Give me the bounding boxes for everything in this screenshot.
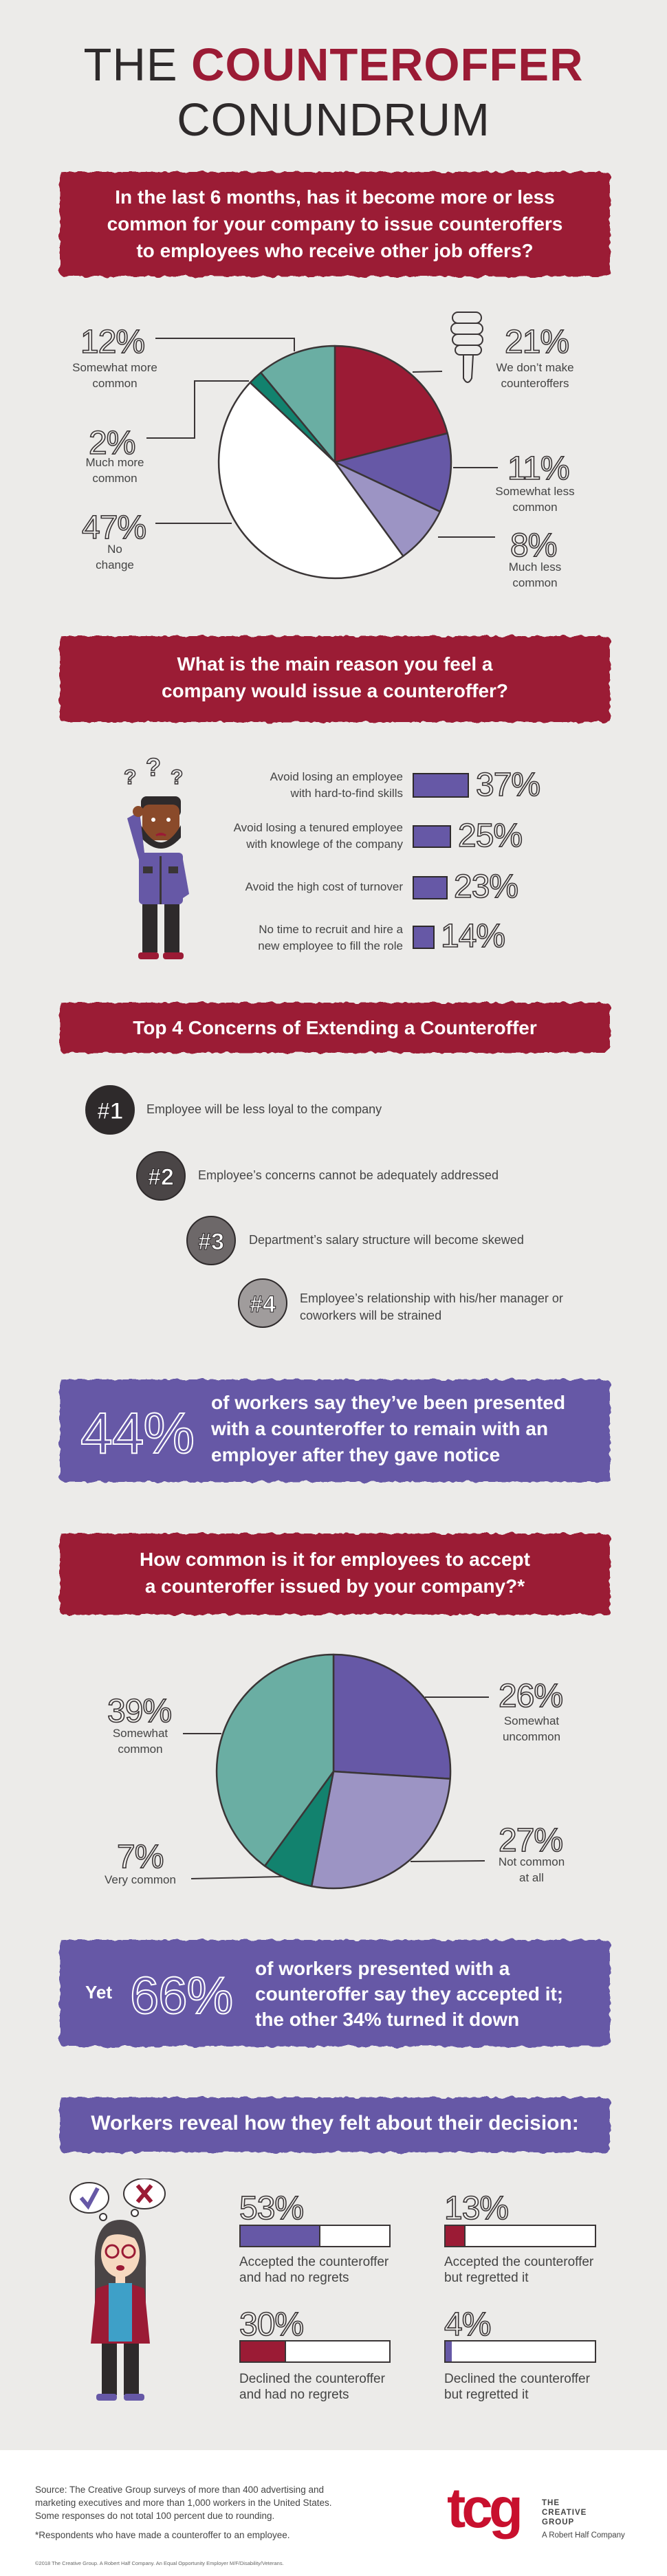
label: 26%: Somewhat	[504, 1714, 559, 1727]
bar row 2: with knowlege of the company	[246, 838, 403, 851]
banner: question 2	[60, 636, 610, 722]
label: 8%: common	[512, 576, 558, 589]
stat: 30% declined no regrets	[239, 2306, 391, 2402]
stat: 53% accepted no regrets: and had no regrets	[239, 2271, 349, 2285]
concern 1	[85, 1085, 382, 1135]
question 2 text: company would issue a counteroffer?	[162, 680, 508, 701]
label: 39%: common	[118, 1743, 163, 1756]
bar row 1	[270, 770, 403, 800]
stat: 13% accepted regretted: 13%	[444, 2190, 508, 2227]
question 1 text	[107, 186, 562, 261]
66% text	[255, 1958, 563, 2030]
title	[84, 39, 583, 146]
label: 39%: Somewhat	[113, 1727, 168, 1740]
label: 12%: Somewhat more	[72, 361, 157, 374]
banner: workers reveal	[60, 2097, 610, 2152]
66% text: counteroffer say they accepted it;	[255, 1983, 563, 2005]
title: THE COUNTEROFFER	[84, 39, 583, 91]
stat: 30% declined no regrets: 30%	[239, 2306, 303, 2343]
concerns heading: Top 4 Concerns of Extending a Counteroffer	[133, 1017, 537, 1038]
illustration: woman with thought bubbles	[69, 2179, 166, 2401]
bar row 4: No time to recruit and hire a	[259, 923, 403, 936]
label: 7%	[105, 1839, 176, 1886]
question 2 text	[162, 653, 508, 701]
question 1 text: In the last 6 months, has it become more or less	[115, 186, 555, 208]
illustration: confused man: ?	[124, 766, 136, 789]
big number 44%: 44%	[80, 1401, 194, 1465]
label: 47%: change	[96, 558, 134, 571]
bar row 1: Avoid losing an employee	[270, 770, 403, 783]
44% text: with a counteroffer to remain with an	[211, 1418, 548, 1439]
logo: tcg	[447, 2477, 519, 2540]
concern 4	[238, 1278, 563, 1328]
stat: 4% declined regretted: but regretted it	[444, 2388, 529, 2402]
concern 2: Employee’s concerns cannot be adequately addressed	[198, 1168, 499, 1182]
label: 47%: 47%	[82, 510, 146, 546]
label: 8%	[509, 527, 561, 589]
label: 11%: common	[512, 501, 558, 514]
label: 2%: 2%	[89, 425, 135, 461]
label: 12%	[72, 324, 157, 390]
stat: 53% accepted no regrets: 53%	[239, 2190, 303, 2227]
bar row 2: Avoid losing a tenured employee	[234, 821, 403, 834]
66% text: of workers presented with a	[255, 1958, 510, 1979]
label: 11%: 11%	[507, 450, 569, 487]
bar row 4: new employee to fill the role	[258, 939, 403, 952]
bar row 4	[258, 923, 403, 952]
label: 21%	[496, 324, 574, 390]
banner: top 4 concerns	[60, 1003, 610, 1053]
bar row 1: with hard-to-find skills	[291, 787, 403, 800]
illustration: confused man: ?	[171, 766, 183, 789]
stat: 13% accepted regretted: Accepted the counteroffer	[444, 2255, 593, 2269]
label: 12%: 12%	[80, 324, 144, 360]
logo: CREATIVE	[542, 2509, 587, 2517]
label: 21%: counteroffers	[501, 377, 569, 390]
44% text: of workers say they’ve been presented	[211, 1392, 565, 1413]
66% text: the other 34% turned it down	[255, 2009, 519, 2030]
stat: 53% accepted no regrets: Accepted the counteroffer	[239, 2255, 389, 2269]
bar chart: reasons: 14%	[441, 918, 505, 954]
concern 4: #4	[250, 1291, 276, 1318]
source text: marketing executives and more than 1,000 workers in the United States.	[35, 2498, 331, 2508]
label: 2%	[85, 425, 144, 485]
label: 26%: 26%	[499, 1678, 562, 1714]
concern 4: coworkers will be strained	[300, 1309, 441, 1322]
concern 3	[186, 1216, 524, 1265]
concern 2: #2	[148, 1164, 174, 1190]
callout: 44%	[60, 1379, 610, 1482]
label: 26%	[499, 1678, 562, 1743]
label: 8%: 8%	[510, 527, 556, 564]
footer	[0, 2450, 667, 2576]
label: 11%: Somewhat less	[495, 485, 575, 498]
label: 21%: We don’t make	[496, 361, 574, 374]
stat: 53% accepted no regrets	[239, 2190, 391, 2285]
question 1 text: common for your company to issue counteroffers	[107, 213, 562, 234]
concern 4: Employee’s relationship with his/her manager or	[300, 1291, 563, 1305]
pie chart 1	[146, 338, 498, 579]
label: 27%: 27%	[499, 1822, 562, 1859]
label: 27%	[499, 1822, 565, 1884]
logo: GROUP	[542, 2518, 574, 2526]
source text: Source: The Creative Group surveys of more than 400 advertising and	[35, 2485, 324, 2495]
banner: question 3	[60, 1533, 610, 1615]
pie chart 2	[183, 1653, 489, 1890]
callout: 66%	[60, 1940, 610, 2046]
label: 7%: Very common	[105, 1873, 176, 1886]
bar row 3: Avoid the high cost of turnover	[245, 880, 403, 893]
title: CONUNDRUM	[177, 94, 490, 146]
label: 12%: common	[92, 377, 138, 390]
question 3 text	[140, 1549, 530, 1597]
illustration: confused man	[124, 756, 189, 959]
concern 3: #3	[198, 1229, 224, 1255]
44% text: employer after they gave notice	[211, 1444, 500, 1465]
stat: 4% declined regretted	[444, 2306, 596, 2402]
label: 21%: 21%	[505, 324, 569, 360]
stat: 30% declined no regrets: and had no regrets	[239, 2388, 349, 2402]
concern 3: Department’s salary structure will become skewed	[249, 1233, 524, 1247]
concern 1: #1	[97, 1098, 123, 1124]
icon: thumbs down	[450, 312, 483, 383]
footnote: *Respondents who have made a counteroffer to an employee.	[35, 2530, 290, 2540]
stat: 4% declined regretted: 4%	[444, 2306, 490, 2343]
label: 8%: Much less	[509, 560, 561, 574]
logo: A Robert Half Company	[542, 2531, 625, 2540]
label: 2%: common	[92, 472, 138, 485]
44% text	[210, 1392, 565, 1465]
label: 7%: 7%	[117, 1839, 163, 1875]
copyright: ©2018 The Creative Group. A Robert Half Company. An Equal Opportunity Employer M/F/Disability/Veterans.	[35, 2560, 284, 2566]
question 3 text: How common is it for employees to accept	[140, 1549, 530, 1570]
label: 11%	[495, 450, 575, 514]
concern 2	[136, 1151, 499, 1201]
logo: THE	[542, 2499, 560, 2507]
logo	[447, 2477, 625, 2540]
bar chart: reasons: 37%	[476, 767, 540, 803]
source text	[35, 2485, 331, 2521]
bar row 2	[234, 821, 403, 851]
stat: 4% declined regretted: Declined the counteroffer	[444, 2372, 590, 2386]
bar chart: reasons	[234, 767, 540, 954]
banner: question 1	[60, 172, 610, 276]
stat: 13% accepted regretted: but regretted it	[444, 2271, 529, 2285]
question 2 text: What is the main reason you feel a	[177, 653, 492, 675]
big number 66%: 66%	[130, 1967, 232, 2025]
label: 2%: Much more	[85, 456, 144, 469]
concern 1: Employee will be less loyal to the company	[146, 1102, 382, 1116]
stat: 30% declined no regrets: Declined the counteroffer	[239, 2372, 385, 2386]
label: 39%	[107, 1693, 172, 1756]
bar chart: reasons: 25%	[458, 818, 522, 854]
bar chart: reasons: 23%	[454, 869, 518, 905]
workers reveal heading: Workers reveal how they felt about their decision:	[91, 2112, 579, 2135]
question 1 text: to employees who receive other job offers?	[136, 240, 534, 261]
label: 27%: at all	[519, 1871, 544, 1884]
label: 47%: No	[107, 543, 122, 556]
label: 39%: 39%	[107, 1693, 171, 1729]
label: 47%	[82, 510, 146, 571]
question 3 text: a counteroffer issued by your company?*	[145, 1575, 525, 1597]
Yet: Yet	[85, 1982, 112, 2002]
label: 27%: Not common	[499, 1855, 565, 1868]
stat: 13% accepted regretted	[444, 2190, 596, 2285]
source text: Some responses do not total 100 percent due to rounding.	[35, 2511, 274, 2521]
label: 26%: uncommon	[503, 1730, 560, 1743]
